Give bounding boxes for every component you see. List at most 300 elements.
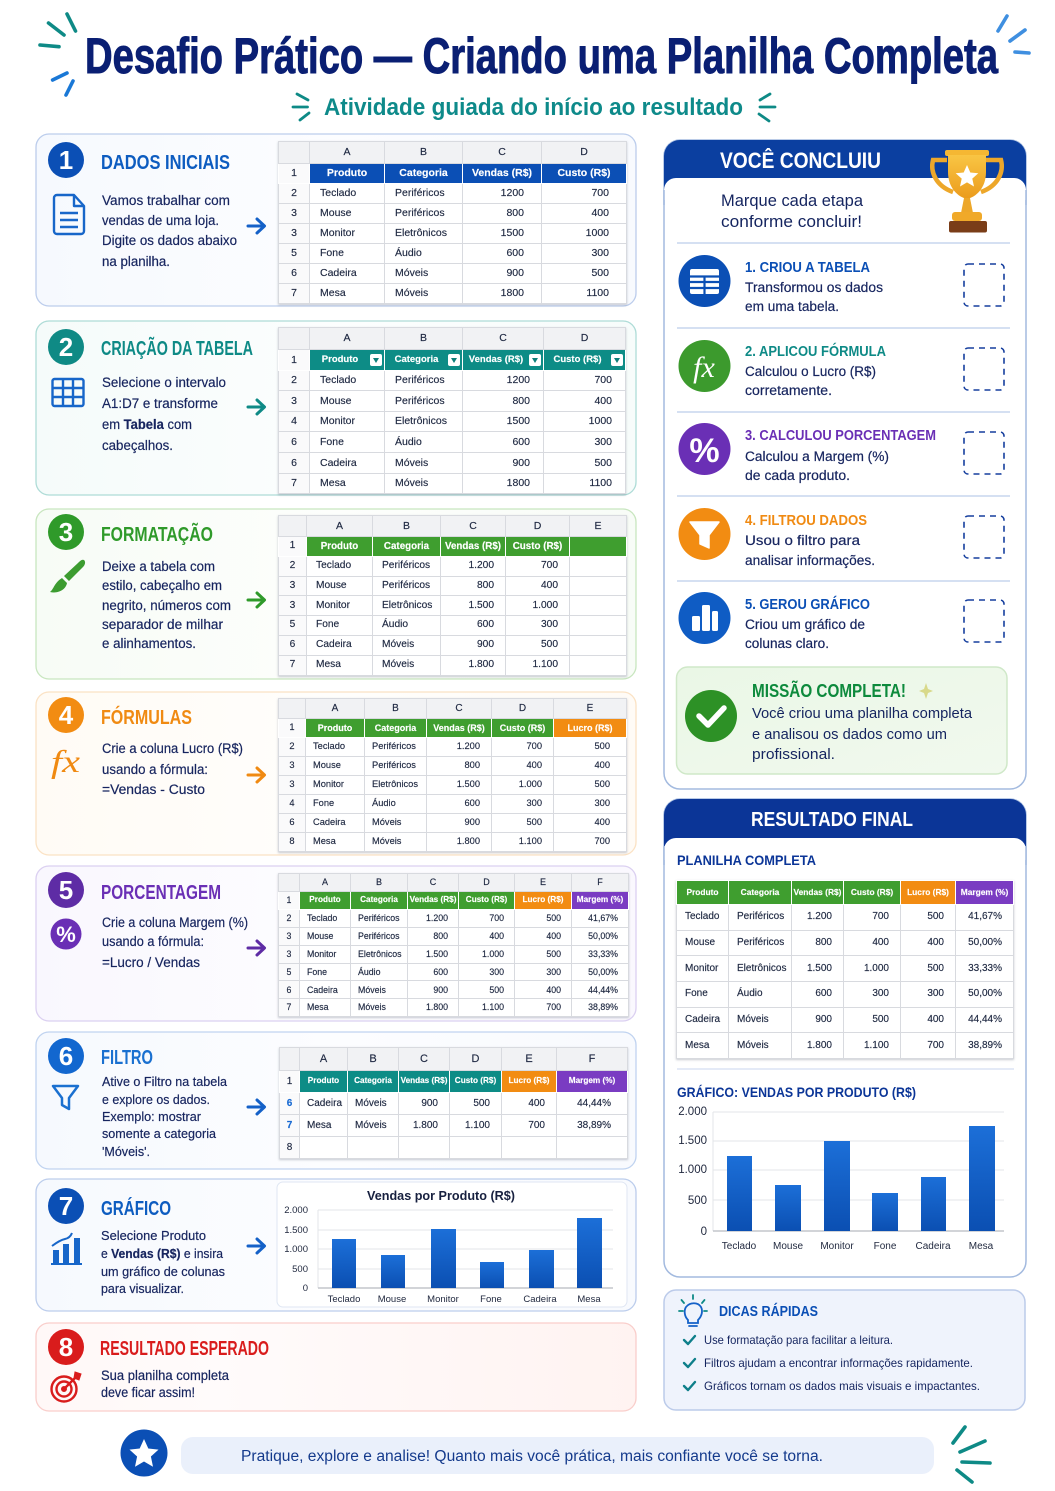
panel: você concluiu checklist (663, 139, 1027, 790)
spreadsheet: filtro: 900 (421, 1098, 438, 1108)
spreadsheet: coluna margem: Mesa (307, 1002, 329, 1012)
spreadsheet: tabela formatada: 4 (291, 415, 297, 427)
spreadsheet: filtro: Mesa (307, 1120, 331, 1130)
spreadsheet: dados iniciais: Vendas (R$) (472, 167, 532, 179)
spreadsheet: tabela formatada: Mouse (320, 395, 352, 407)
panel: step 3 formatação (35, 508, 637, 680)
spreadsheet: planilha completa: Áudio (737, 988, 763, 999)
callout: missão completa (676, 667, 1007, 774)
bars (727, 1126, 995, 1231)
description: vendas de uma loja. (102, 213, 219, 228)
spreadsheet: dados iniciais: 900 (506, 267, 524, 279)
icon: brush (50, 560, 85, 592)
spreadsheet: tabela com estilo: E (594, 520, 602, 532)
spreadsheet: coluna margem: 6 (287, 984, 291, 994)
panel: step 8 resultado esperado (35, 1322, 637, 1412)
spreadsheet: tabela com estilo: 700 (541, 560, 558, 571)
spreadsheet: planilha completa: 400 (927, 1014, 944, 1025)
spreadsheet: tabela formatada: Fone (320, 436, 344, 448)
intro text: conforme concluir! (721, 212, 862, 231)
spreadsheet: planilha completa: Periféricos (737, 937, 784, 948)
spreadsheet: tabela com estilo: 5 (290, 619, 295, 630)
description: Crie a coluna Margem (%) (102, 915, 248, 930)
spreadsheet: filtro: Vendas (R$) (401, 1076, 447, 1085)
badge 3 (48, 514, 84, 550)
spreadsheet: filtro: Margem (%) (569, 1076, 615, 1085)
spreadsheet: dados iniciais: Periféricos (395, 187, 445, 199)
description: negrito, números com (102, 598, 231, 613)
icon: light bulb (679, 1295, 707, 1326)
spreadsheet: coluna margem: 400 (546, 984, 561, 994)
spreadsheet: tabela formatada (278, 327, 626, 494)
arrow (248, 1239, 264, 1253)
spreadsheet: dados iniciais: C (498, 146, 506, 158)
spreadsheet: tabela com estilo: 800 (477, 580, 494, 591)
spreadsheet: filtro: Produto (308, 1076, 339, 1085)
spreadsheet: tabela formatada: 1200 (507, 374, 530, 386)
spreadsheet: dados iniciais: 600 (506, 247, 524, 259)
decorative sparks: title right (998, 16, 1029, 53)
spreadsheet: dados iniciais: 400 (591, 207, 609, 219)
badge 2: 2 (59, 332, 73, 362)
description: usando a fórmula: (102, 762, 208, 777)
spreadsheet: planilha completa: Periféricos (737, 911, 784, 922)
spreadsheet: filtro: 400 (528, 1098, 545, 1108)
badge 5 (48, 872, 84, 908)
spreadsheet: tabela com estilo: 1.800 (468, 659, 494, 670)
spreadsheet: coluna lucro: Mouse (313, 760, 341, 770)
callout: missão completa: MISSÃO COMPLETA! (752, 680, 906, 701)
spreadsheet: tabela com estilo: Móveis (382, 659, 414, 670)
panel: step 7 gráfico (35, 1178, 637, 1312)
callout: missão completa: e analisou os dados como um (752, 726, 947, 743)
item 4: filtrou dados: 4. FILTROU DADOS (745, 513, 867, 529)
spreadsheet: tabela com estilo (278, 515, 627, 676)
spreadsheet: coluna margem: 3 (287, 931, 291, 941)
axis labels: 1.500 (284, 1225, 308, 1236)
item 3: calculou porcentagem: 3. CALCULOU PORCENTAGEM (745, 428, 936, 444)
icon: grid (52, 379, 84, 406)
spreadsheet: coluna margem: Fone (307, 967, 327, 977)
spreadsheet: tabela formatada: 800 (512, 395, 530, 407)
spreadsheet: coluna margem: 800 (433, 931, 448, 941)
heading: FILTRO (101, 1047, 153, 1069)
axis labels: 2.000 (678, 1106, 707, 1118)
spreadsheet: planilha completa: 1.500 (807, 963, 832, 974)
spreadsheet: coluna lucro: C (455, 702, 463, 714)
spreadsheet: tabela formatada: 700 (594, 374, 612, 386)
description: separador de milhar (102, 617, 223, 632)
item 1: criou a tabela: 1. CRIOU A TABELA (745, 260, 870, 276)
spreadsheet: dados iniciais: Áudio (395, 247, 422, 259)
chart: vendas por produto: Teclado (328, 1294, 360, 1305)
spreadsheet: tabela formatada: 3 (291, 395, 297, 407)
spreadsheet: planilha completa: Móveis (737, 1040, 769, 1051)
spreadsheet: coluna margem: 33,33% (588, 949, 618, 959)
badge 1 (48, 142, 84, 178)
chart: vendas por produto: Monitor (820, 1241, 854, 1252)
header band: VOCÊ CONCLUIU (720, 148, 881, 173)
badge 6 (48, 1038, 84, 1074)
item 5: gerou gráfico (678, 592, 1004, 651)
spreadsheet: coluna lucro: 700 (594, 836, 610, 846)
spreadsheet: filtro: Lucro (R$) (509, 1076, 549, 1085)
heading: FÓRMULAS (101, 705, 192, 729)
description (101, 1368, 229, 1400)
spreadsheet: dados iniciais: 3 (291, 227, 297, 239)
spreadsheet: coluna lucro: Teclado (313, 741, 345, 751)
spreadsheet: tabela formatada: 1000 (589, 415, 612, 427)
chart: vendas por produto: Mouse (378, 1294, 406, 1305)
spreadsheet: filtro: E (525, 1052, 533, 1064)
spreadsheet: tabela formatada: 6 (291, 436, 297, 448)
spreadsheet: coluna margem: 5 (287, 967, 291, 977)
spreadsheet: planilha completa: Produto (686, 887, 719, 897)
spreadsheet: dados iniciais: A (343, 146, 350, 158)
spreadsheet: dados iniciais: Monitor (320, 227, 355, 239)
spreadsheet: planilha completa: 400 (927, 937, 944, 948)
spreadsheet: planilha completa: Margem (%) (961, 887, 1008, 897)
spreadsheet: coluna lucro: Mesa (313, 836, 336, 846)
spreadsheet: dados iniciais: Periféricos (395, 207, 445, 219)
spreadsheet: filtro: Móveis (355, 1120, 387, 1130)
item 2: aplicou fórmula: Calculou o Lucro (R$) (745, 364, 876, 379)
spreadsheet: tabela formatada: Produto (322, 354, 358, 365)
spreadsheet: coluna margem: 2 (287, 913, 291, 923)
spreadsheet: tabela formatada: 300 (594, 436, 612, 448)
spreadsheet: planilha completa: 1.100 (864, 1040, 889, 1051)
description: Sua planilha completa (101, 1368, 229, 1383)
spreadsheet: coluna lucro: 1 (289, 722, 295, 732)
icon: trophy (932, 150, 1002, 232)
spreadsheet: planilha completa (676, 880, 1014, 1059)
description (102, 915, 248, 970)
spreadsheet: dados iniciais: Mesa (320, 287, 346, 299)
spreadsheet: tabela com estilo: 1.200 (468, 560, 494, 571)
spreadsheet: planilha completa: 500 (872, 1014, 889, 1025)
spreadsheet: tabela com estilo: 6 (290, 639, 295, 650)
spreadsheet: coluna margem: 1 (287, 895, 291, 905)
item 2: aplicou fórmula: fx (693, 351, 716, 384)
spreadsheet: filtro: 700 (528, 1120, 545, 1130)
spreadsheet: planilha completa: Mouse (685, 937, 715, 948)
chart: vendas por produto: Monitor (427, 1294, 459, 1305)
spreadsheet: coluna lucro: Vendas (R$) (433, 722, 485, 732)
spreadsheet: tabela com estilo: 1.000 (532, 600, 558, 611)
icon: percent: % (56, 922, 76, 947)
decorative sparks: footer (953, 1427, 990, 1482)
heading: CRIAÇÃO DA TABELA (101, 337, 253, 360)
spreadsheet: coluna lucro: Lucro (R$) (568, 722, 612, 732)
panel: step 1 dados iniciais (35, 133, 637, 307)
spreadsheet: dados iniciais: 1000 (586, 227, 609, 239)
axis labels: 500 (688, 1195, 707, 1207)
spreadsheet: coluna margem: 50,00% (588, 967, 618, 977)
spreadsheet: coluna lucro: 1.500 (457, 779, 480, 789)
description: um gráfico de colunas (101, 1264, 225, 1279)
spreadsheet: coluna margem: 1.200 (426, 913, 448, 923)
icon: fx: fx (51, 743, 80, 779)
arrow (248, 1100, 264, 1114)
heading: PORCENTAGEM (101, 882, 221, 904)
spreadsheet: coluna lucro: Periféricos (372, 760, 416, 770)
spreadsheet: coluna lucro: Monitor (313, 779, 344, 789)
spreadsheet: coluna lucro: 700 (526, 741, 542, 751)
axis labels: 1.000 (678, 1164, 707, 1176)
spreadsheet: tabela com estilo: 600 (477, 619, 494, 630)
item 5: gerou gráfico: 5. GEROU GRÁFICO (745, 596, 870, 613)
spreadsheet: coluna margem: Monitor (307, 949, 336, 959)
spreadsheet: dados iniciais: D (580, 146, 588, 158)
spreadsheet: filtro: 500 (473, 1098, 490, 1108)
spreadsheet: planilha completa: Lucro (R$) (907, 887, 949, 897)
spreadsheet: coluna margem: 300 (489, 967, 504, 977)
spreadsheet: coluna margem: 41,67% (588, 913, 618, 923)
spreadsheet: tabela formatada: 1500 (507, 415, 530, 427)
spreadsheet: coluna margem: Eletrônicos (358, 949, 402, 959)
spreadsheet: filtro: B (369, 1052, 377, 1064)
spreadsheet: coluna lucro (278, 698, 627, 852)
spreadsheet: tabela com estilo: 2 (290, 560, 295, 571)
item 4: filtrou dados: Usou o filtro para (745, 533, 861, 548)
spreadsheet: tabela formatada: 7 (291, 477, 297, 489)
spreadsheet: tabela formatada: Custo (R$) (553, 354, 602, 365)
spreadsheet: coluna margem: 700 (546, 1002, 561, 1012)
spreadsheet: tabela com estilo: Mesa (316, 659, 341, 670)
axis labels: 0 (303, 1283, 308, 1294)
spreadsheet: tabela com estilo: 7 (290, 659, 295, 670)
description: e explore os dados. (102, 1092, 210, 1107)
spreadsheet: dados iniciais: Móveis (395, 287, 428, 299)
spreadsheet: coluna margem: Custo (R$) (466, 895, 507, 904)
panel: step 2 criação da tabela (35, 320, 637, 496)
spreadsheet: coluna margem: E (540, 877, 546, 887)
spreadsheet: tabela formatada: Móveis (395, 477, 428, 489)
item 3: calculou porcentagem: % (689, 432, 720, 470)
spreadsheet: coluna margem: A (322, 877, 328, 887)
spreadsheet: coluna margem: 44,44% (588, 984, 618, 994)
title (38, 12, 1031, 122)
decorative sparks: title left (40, 14, 76, 95)
spreadsheet: coluna margem: 600 (433, 967, 448, 977)
chart: vendas por produto: Cadeira (523, 1294, 557, 1305)
spreadsheet: coluna lucro: Custo (R$) (500, 722, 545, 732)
header band (664, 140, 1026, 205)
spreadsheet: coluna lucro: Produto (318, 722, 352, 732)
heading: DICAS RÁPIDAS (719, 1303, 818, 1320)
badge 8: 8 (59, 1332, 73, 1362)
spreadsheet: coluna lucro: 1.800 (457, 836, 480, 846)
spreadsheet: coluna lucro: 900 (464, 817, 480, 827)
spreadsheet: dados iniciais: 3 (291, 207, 297, 219)
spreadsheet: dados iniciais: 1100 (586, 287, 609, 299)
spreadsheet: coluna lucro: Áudio (372, 798, 396, 808)
spreadsheet: tabela com estilo: 3 (290, 600, 295, 611)
spreadsheet: tabela formatada: 900 (512, 457, 530, 469)
item 4: filtrou dados (678, 508, 1004, 568)
spreadsheet: coluna margem (278, 873, 629, 1017)
spreadsheet: coluna lucro: 3 (289, 760, 295, 770)
spreadsheet: filtro (279, 1047, 628, 1159)
spreadsheet: dados iniciais (278, 141, 627, 304)
spreadsheet: coluna margem: 1.000 (482, 949, 504, 959)
spreadsheet: coluna margem: 1.100 (482, 1002, 504, 1012)
spreadsheet: planilha completa: 41,67% (968, 911, 1002, 922)
spreadsheet: filtro: Categoria (354, 1076, 392, 1085)
spreadsheet: coluna lucro: 600 (464, 798, 480, 808)
spreadsheet: planilha completa: Mesa (685, 1040, 709, 1051)
spreadsheet: tabela formatada: Teclado (320, 374, 356, 386)
description: A1:D7 e transforme (102, 396, 218, 411)
spreadsheet: coluna lucro: 300 (594, 798, 610, 808)
item 1: criou a tabela: Transformou os dados (745, 280, 883, 295)
spreadsheet: tabela com estilo: Categoria (384, 540, 429, 552)
spreadsheet: tabela formatada: Eletrônicos (395, 415, 447, 427)
spreadsheet: dados iniciais: 1800 (501, 287, 524, 299)
spreadsheet: planilha completa: Fone (685, 988, 708, 999)
badge 2 (48, 329, 84, 365)
axis labels: 1.000 (284, 1244, 308, 1255)
spreadsheet: coluna lucro: B (392, 702, 399, 714)
chart: vendas por produto: Fone (480, 1294, 502, 1305)
spreadsheet: dados iniciais: 1 (291, 167, 297, 179)
spreadsheet: coluna margem: 500 (489, 984, 504, 994)
spreadsheet: dados iniciais: 700 (591, 187, 609, 199)
spreadsheet: coluna margem: Periféricos (358, 913, 400, 923)
spreadsheet: tabela com estilo: A (336, 520, 343, 532)
spreadsheet: coluna lucro: Móveis (372, 836, 401, 846)
description: Selecione Produto (101, 1228, 206, 1243)
spreadsheet: planilha completa: Móveis (737, 1014, 769, 1025)
spreadsheet: filtro: A (320, 1052, 327, 1064)
description: Deixe a tabela com (102, 559, 215, 574)
spreadsheet: dados iniciais: 6 (291, 267, 297, 279)
description: Exemplo: mostrar (102, 1109, 202, 1124)
spreadsheet: tabela formatada: 1100 (589, 477, 612, 489)
description (102, 193, 237, 269)
spreadsheet: planilha completa: 600 (815, 988, 832, 999)
spreadsheet: coluna margem: 38,89% (588, 1002, 618, 1012)
subtitle: Atividade guiada do início ao resultado (324, 94, 743, 121)
item 1: criou a tabela (678, 255, 1004, 314)
spreadsheet: planilha completa: 1.200 (807, 911, 832, 922)
spreadsheet: tabela formatada: Monitor (320, 415, 355, 427)
spreadsheet: tabela com estilo: Periféricos (382, 560, 430, 571)
chart: vendas por produto: Mouse (773, 1241, 803, 1252)
spreadsheet: coluna lucro: 400 (594, 817, 610, 827)
spreadsheet: coluna margem: Mouse (307, 931, 333, 941)
item 3: calculou porcentagem (678, 423, 1004, 483)
spreadsheet: coluna margem: C (430, 877, 436, 887)
spreadsheet: coluna lucro: Cadeira (313, 817, 346, 827)
item 3: calculou porcentagem: de cada produto. (745, 468, 850, 483)
description: somente a categoria (102, 1126, 217, 1141)
message bar: Pratique, explore e analise! Quanto mais você prática, mais confiante você se torna. (241, 1448, 823, 1465)
spreadsheet: tabela formatada: 1 (291, 354, 297, 366)
axis labels: 500 (292, 1264, 308, 1275)
spreadsheet: tabela com estilo: Mouse (316, 580, 347, 591)
spreadsheet: dados iniciais: 7 (291, 287, 297, 299)
panel: resultado final (663, 798, 1027, 1278)
description: Crie a coluna Lucro (R$) (102, 741, 243, 756)
spreadsheet: planilha completa: 400 (872, 937, 889, 948)
message bar (181, 1437, 934, 1474)
spreadsheet: dados iniciais: 5 (291, 247, 297, 259)
item 2: aplicou fórmula: 2. APLICOU FÓRMULA (745, 342, 886, 360)
description: usando a fórmula: (102, 934, 204, 949)
spreadsheet: coluna lucro: 800 (464, 760, 480, 770)
description: e alinhamentos. (102, 636, 196, 651)
heading: GRÁFICO (101, 1197, 171, 1220)
arrow (248, 219, 264, 233)
spreadsheet: planilha completa: 500 (927, 911, 944, 922)
tips list: Filtros ajudam a encontrar informações rapidamente. (704, 1356, 973, 1370)
spreadsheet: tabela formatada: 6 (291, 457, 297, 469)
spreadsheet: filtro: 44,44% (577, 1098, 611, 1108)
axis labels (678, 1106, 707, 1238)
spreadsheet: dados iniciais: Produto (327, 167, 367, 179)
spreadsheet: coluna margem: Lucro (R$) (523, 895, 563, 904)
spreadsheet: tabela com estilo: Monitor (316, 600, 350, 611)
spreadsheet: coluna margem: Móveis (358, 1002, 386, 1012)
spreadsheet: coluna lucro: 4 (289, 798, 295, 808)
tips list: Use formatação para facilitar a leitura. (704, 1333, 893, 1347)
spreadsheet: planilha completa: Cadeira (685, 1014, 720, 1025)
spreadsheet: tabela formatada: 2 (291, 374, 297, 386)
arrow (248, 400, 264, 414)
badge 6: 6 (59, 1041, 73, 1071)
spreadsheet: tabela com estilo: Móveis (382, 639, 414, 650)
spreadsheet: tabela formatada: B (420, 332, 427, 344)
spreadsheet: tabela com estilo: Periféricos (382, 580, 430, 591)
spreadsheet: coluna lucro: Periféricos (372, 741, 416, 751)
description: na planilha. (102, 254, 170, 269)
spreadsheet: coluna margem: 500 (546, 913, 561, 923)
spreadsheet: coluna lucro: 300 (526, 798, 542, 808)
spreadsheet: tabela formatada: Cadeira (320, 457, 357, 469)
spreadsheet: coluna lucro: 1.100 (519, 836, 542, 846)
description: 'Móveis'. (102, 1144, 150, 1159)
badge 4: 4 (59, 700, 74, 730)
spreadsheet: dados iniciais: 300 (591, 247, 609, 259)
spreadsheet: tabela com estilo: Áudio (382, 619, 408, 630)
badge 7: 7 (59, 1191, 73, 1221)
subheading: planilha: PLANILHA COMPLETA (677, 852, 816, 868)
icon: star badge (120, 1430, 168, 1476)
spreadsheet: coluna margem: Categoria (360, 895, 398, 904)
spreadsheet: dados iniciais: Categoria (399, 167, 448, 179)
bars (332, 1218, 602, 1288)
badge 5: 5 (59, 875, 73, 905)
heading: FORMATAÇÃO (101, 523, 213, 546)
description (102, 375, 226, 453)
spreadsheet: coluna margem: 1.500 (426, 949, 448, 959)
spreadsheet: planilha completa: 50,00% (968, 937, 1002, 948)
spreadsheet: coluna margem: Teclado (307, 913, 337, 923)
panel: step 5 porcentagem (35, 865, 637, 1022)
callout: missão completa: Você criou uma planilha completa (752, 705, 973, 722)
spreadsheet: coluna margem: 400 (546, 931, 561, 941)
item 2: aplicou fórmula: corretamente. (745, 383, 832, 398)
description (101, 1228, 225, 1296)
spreadsheet: coluna lucro: 2 (289, 741, 295, 751)
spreadsheet: coluna margem: 900 (433, 984, 448, 994)
spreadsheet: tabela formatada: 600 (512, 436, 530, 448)
spreadsheet: coluna lucro: Móveis (372, 817, 401, 827)
header band: RESULTADO FINAL (751, 808, 913, 831)
header band (664, 799, 1026, 865)
spreadsheet: coluna margem: 7 (287, 1002, 291, 1012)
